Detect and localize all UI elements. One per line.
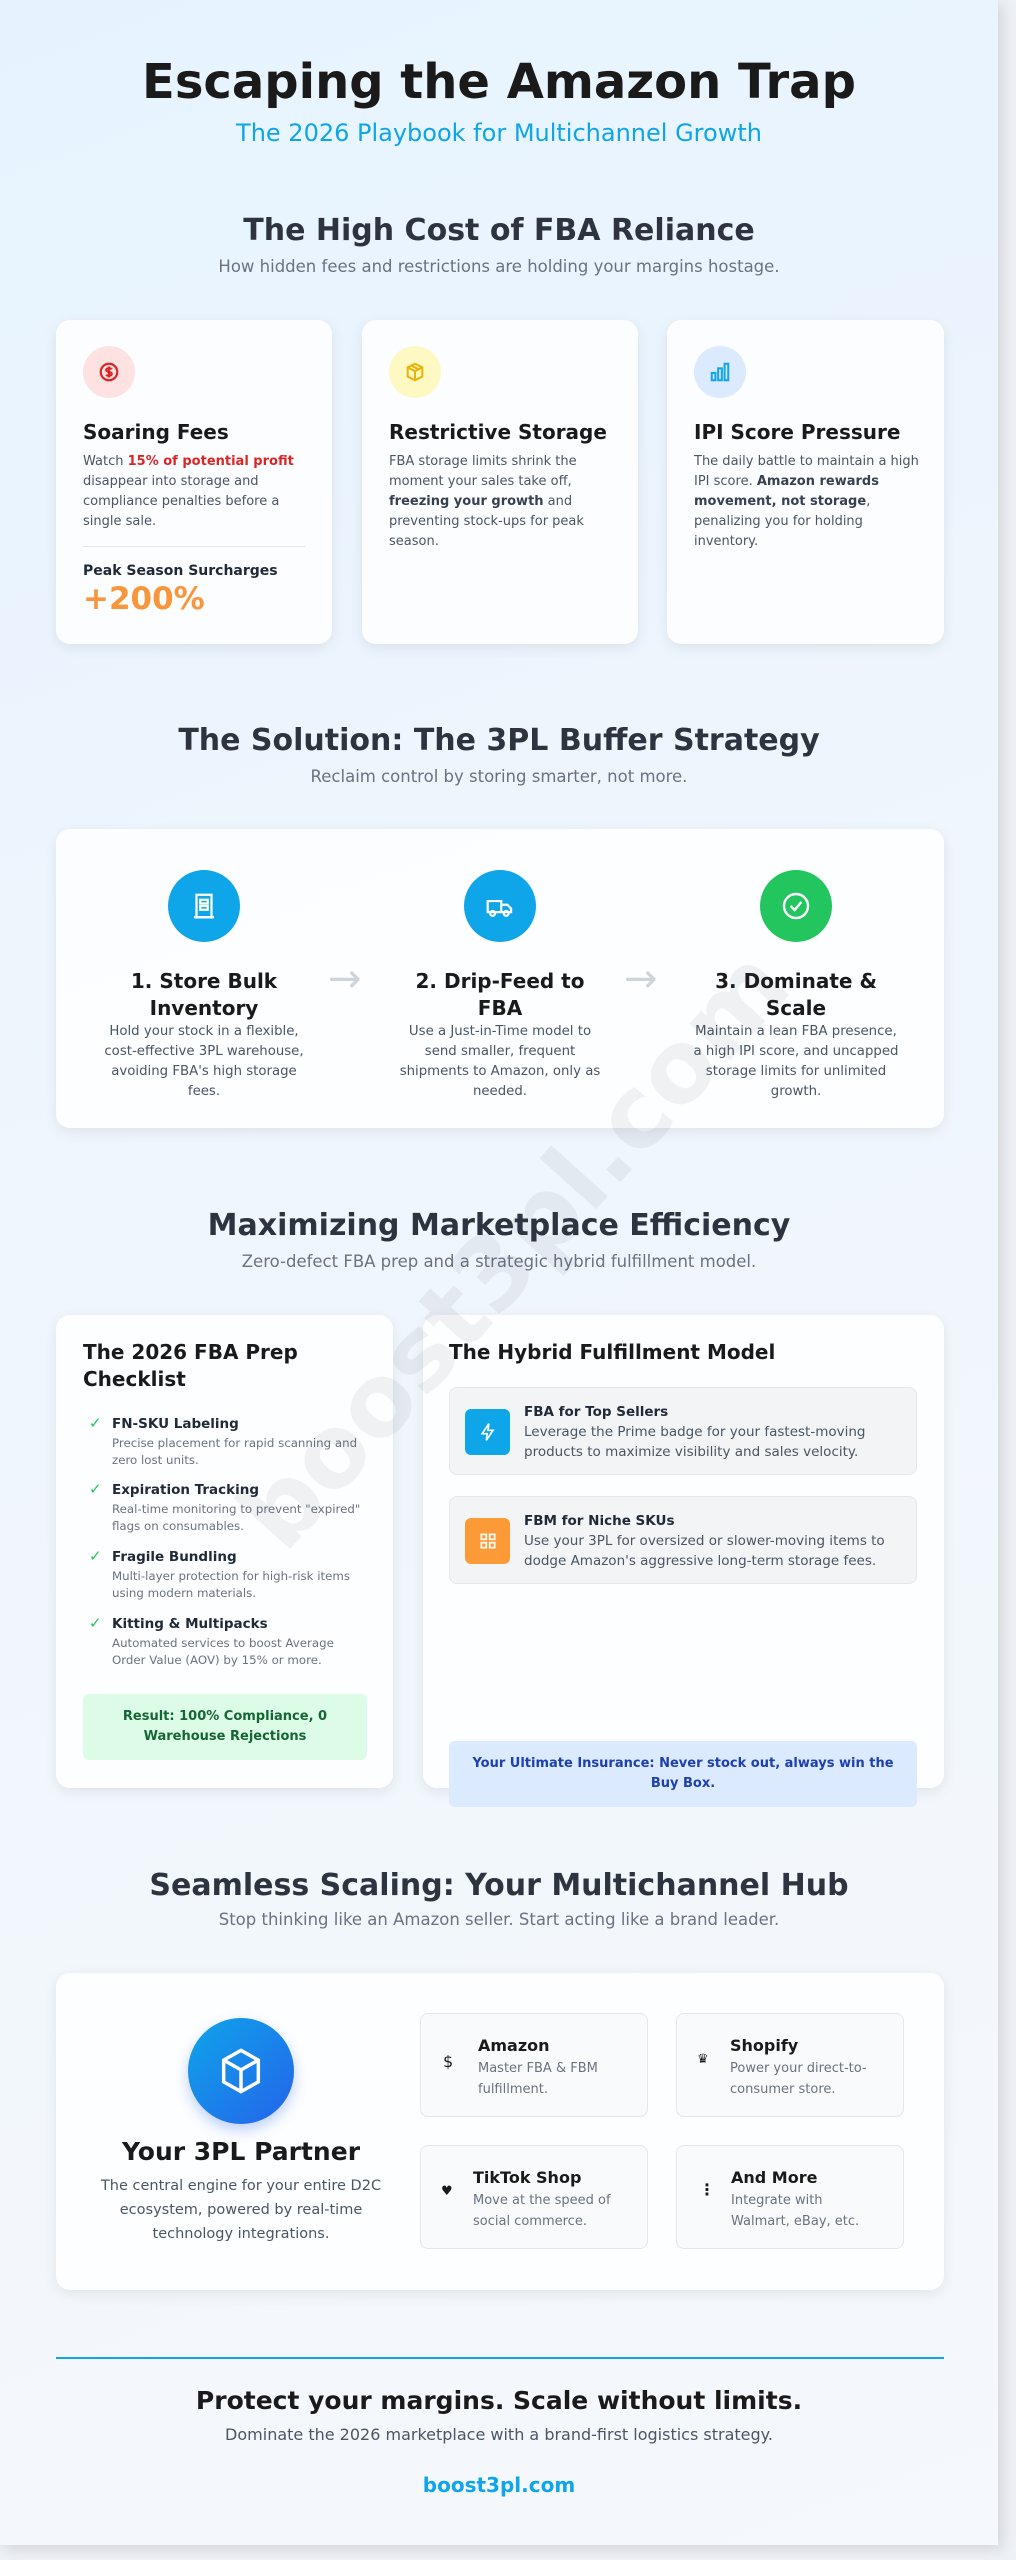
text: Real-time monitoring to prevent "expired" flags on consumables. xyxy=(112,1502,360,1533)
tile: more: ⋮ xyxy=(699,2180,715,2199)
footer link: boost3pl.com xyxy=(423,2473,575,2497)
step 3: 3. Dominate & Scale xyxy=(715,969,877,1020)
text: ✓ xyxy=(89,1614,102,1632)
step 3 xyxy=(694,870,898,1099)
text: ✓ xyxy=(89,1547,102,1565)
arrow: → xyxy=(328,956,362,1002)
text: Fragile Bundling xyxy=(112,1549,237,1565)
subheading: scaling: Stop thinking like an Amazon seller. Start acting like a brand leader. xyxy=(219,1910,779,1929)
card text: FBA storage limits shrink the moment your sales take off, freezing your growth and preventing stock-ups for peak season. xyxy=(389,454,584,549)
panel: restrictive storage xyxy=(362,320,638,644)
step 2: 2. Drip-Feed to FBA xyxy=(416,969,584,1020)
panel: soaring fees xyxy=(56,320,332,644)
tile: TikTok: Move at the speed of xyxy=(473,2193,611,2208)
tile: more: Walmart, eBay, etc. xyxy=(731,2214,859,2229)
tile: TikTok xyxy=(420,2145,648,2249)
card text: The daily battle to maintain a high IPI score. Amazon rewards movement, not storage, penalizing you for holding inventory. xyxy=(694,454,919,549)
checklist item: FN-SKU xyxy=(89,1414,357,1467)
partner title: Your 3PL Partner xyxy=(122,2137,360,2166)
stat: peak surcharge xyxy=(83,563,278,617)
tile: Shopify: consumer store. xyxy=(730,2082,836,2097)
hybrid box: FBA: Leverage the Prime badge for your fastest-moving products to maximize visibility and sales velocity. xyxy=(524,1424,865,1460)
checklist item: expiration xyxy=(89,1480,360,1533)
text: FN-SKU Labeling xyxy=(112,1416,239,1432)
icon: box xyxy=(389,346,441,398)
tile: Amazon: Amazon xyxy=(478,2036,550,2055)
tile: more: And More xyxy=(731,2168,817,2187)
panel: 3-step process xyxy=(56,829,944,1128)
icon: truck xyxy=(464,870,536,942)
subtitle: The 2026 Playbook for Multichannel Growth xyxy=(236,119,762,147)
watermark: boost3pl.com xyxy=(215,927,812,1571)
icon: grid xyxy=(465,1518,510,1564)
text: Precise placement for rapid scanning and zero lost units. xyxy=(112,1436,357,1467)
footer text: Dominate the 2026 marketplace with a brand-first logistics strategy. xyxy=(225,2425,773,2444)
text: Kitting & Multipacks xyxy=(112,1616,268,1632)
tile: Amazon: fulfillment. xyxy=(478,2082,548,2097)
checklist item: kitting xyxy=(89,1614,334,1667)
text: Automated services to boost Average Order Value (AOV) by 15% or more. xyxy=(112,1636,334,1667)
panel: hybrid model xyxy=(423,1315,944,1788)
step 2 xyxy=(400,870,600,1099)
footer headline: Protect your margins. Scale without limits. xyxy=(196,2386,802,2415)
card text: Watch 15% of potential profit disappear into storage and compliance penalties before a single sale. xyxy=(83,454,294,529)
arrow: → xyxy=(624,956,658,1002)
step 1 xyxy=(104,870,304,1099)
subheading: solution: Reclaim control by storing smarter, not more. xyxy=(311,767,687,786)
step 1: Hold your stock in a flexible, cost-effective 3PL warehouse, avoiding FBA's high storage fees. xyxy=(104,1024,304,1099)
heading: efficiency: Maximizing Marketplace Efficiency xyxy=(208,1208,790,1243)
hybrid box: FBA: FBA for Top Sellers xyxy=(524,1404,668,1420)
icon: 3PL cube xyxy=(188,2018,294,2124)
text: ✓ xyxy=(89,1480,102,1498)
icon: check xyxy=(760,870,832,942)
tile: more xyxy=(676,2145,904,2249)
checklist item: fragile xyxy=(89,1547,350,1600)
hybrid title: The Hybrid Fulfillment Model xyxy=(449,1340,775,1364)
stat: peak surcharge: +200% xyxy=(83,581,205,617)
heading: scaling: Seamless Scaling: Your Multichannel Hub xyxy=(149,1868,849,1903)
step 1: 1. Store Bulk Inventory xyxy=(131,969,277,1020)
tile: Amazon: Master FBA & FBM xyxy=(478,2061,598,2076)
insurance callout: Your Ultimate Insurance: Never stock out, always win the Buy Box. xyxy=(472,1756,894,1791)
tile: Amazon: $ xyxy=(443,2052,453,2071)
tile: more: Integrate with xyxy=(731,2193,823,2208)
result callout xyxy=(83,1694,367,1760)
result callout: Warehouse Rejections xyxy=(144,1729,306,1744)
step 2: Use a Just-in-Time model to send smaller, frequent shipments to Amazon, only as needed. xyxy=(400,1024,600,1099)
title: Escaping the Amazon Trap xyxy=(142,54,856,110)
stat: peak surcharge: Peak Season Surcharges xyxy=(83,563,278,579)
icon: dollar xyxy=(83,346,135,398)
hybrid box: FBM: Use your 3PL for oversized or slower-moving items to dodge Amazon's aggressive long-term storage fees. xyxy=(524,1533,885,1569)
card title: Restrictive Storage xyxy=(389,420,607,444)
icon: bar chart xyxy=(694,346,746,398)
hybrid box: FBA xyxy=(449,1387,917,1475)
tile: Shopify: Shopify xyxy=(730,2036,798,2055)
tile: TikTok: social commerce. xyxy=(473,2214,587,2229)
icon: lightning xyxy=(465,1409,510,1455)
heading: solution: The Solution: The 3PL Buffer Strategy xyxy=(178,723,820,758)
tile: Shopify: ♛ xyxy=(697,2052,709,2067)
hybrid box: FBM xyxy=(449,1496,917,1584)
panel: IPI score xyxy=(667,320,944,644)
tile: Amazon xyxy=(420,2013,648,2117)
step 3: Maintain a lean FBA presence, a high IPI score, and uncapped storage limits for unlimited growth. xyxy=(694,1024,898,1099)
text: Expiration Tracking xyxy=(112,1482,259,1498)
checklist title: The 2026 FBA Prep Checklist xyxy=(83,1340,298,1391)
panel: prep checklist xyxy=(56,1315,393,1788)
heading: high cost: The High Cost of FBA Reliance xyxy=(243,213,755,248)
tile: TikTok: ♥ xyxy=(441,2184,453,2199)
insurance callout xyxy=(449,1741,917,1807)
subheading: high cost: How hidden fees and restrictions are holding your margins hostage. xyxy=(218,257,780,276)
text: ✓ xyxy=(89,1414,102,1432)
card title: IPI Score Pressure xyxy=(694,420,900,444)
tile: Shopify: Power your direct-to- xyxy=(730,2061,867,2076)
partner text: The central engine for your entire D2C ecosystem, powered by real-time technology integrations. xyxy=(101,2178,381,2242)
icon: warehouse xyxy=(168,870,240,942)
card title: Soaring Fees xyxy=(83,420,229,444)
hybrid box: FBM: FBM for Niche SKUs xyxy=(524,1513,674,1529)
tile: Shopify xyxy=(676,2013,904,2117)
result callout: Result: 100% Compliance, 0 xyxy=(123,1709,327,1724)
subheading: efficiency: Zero-defect FBA prep and a strategic hybrid fulfillment model. xyxy=(242,1252,756,1271)
text: Multi-layer protection for high-risk items using modern materials. xyxy=(112,1569,350,1600)
tile: TikTok: TikTok Shop xyxy=(473,2168,581,2187)
panel: multichannel hub xyxy=(56,1973,944,2290)
